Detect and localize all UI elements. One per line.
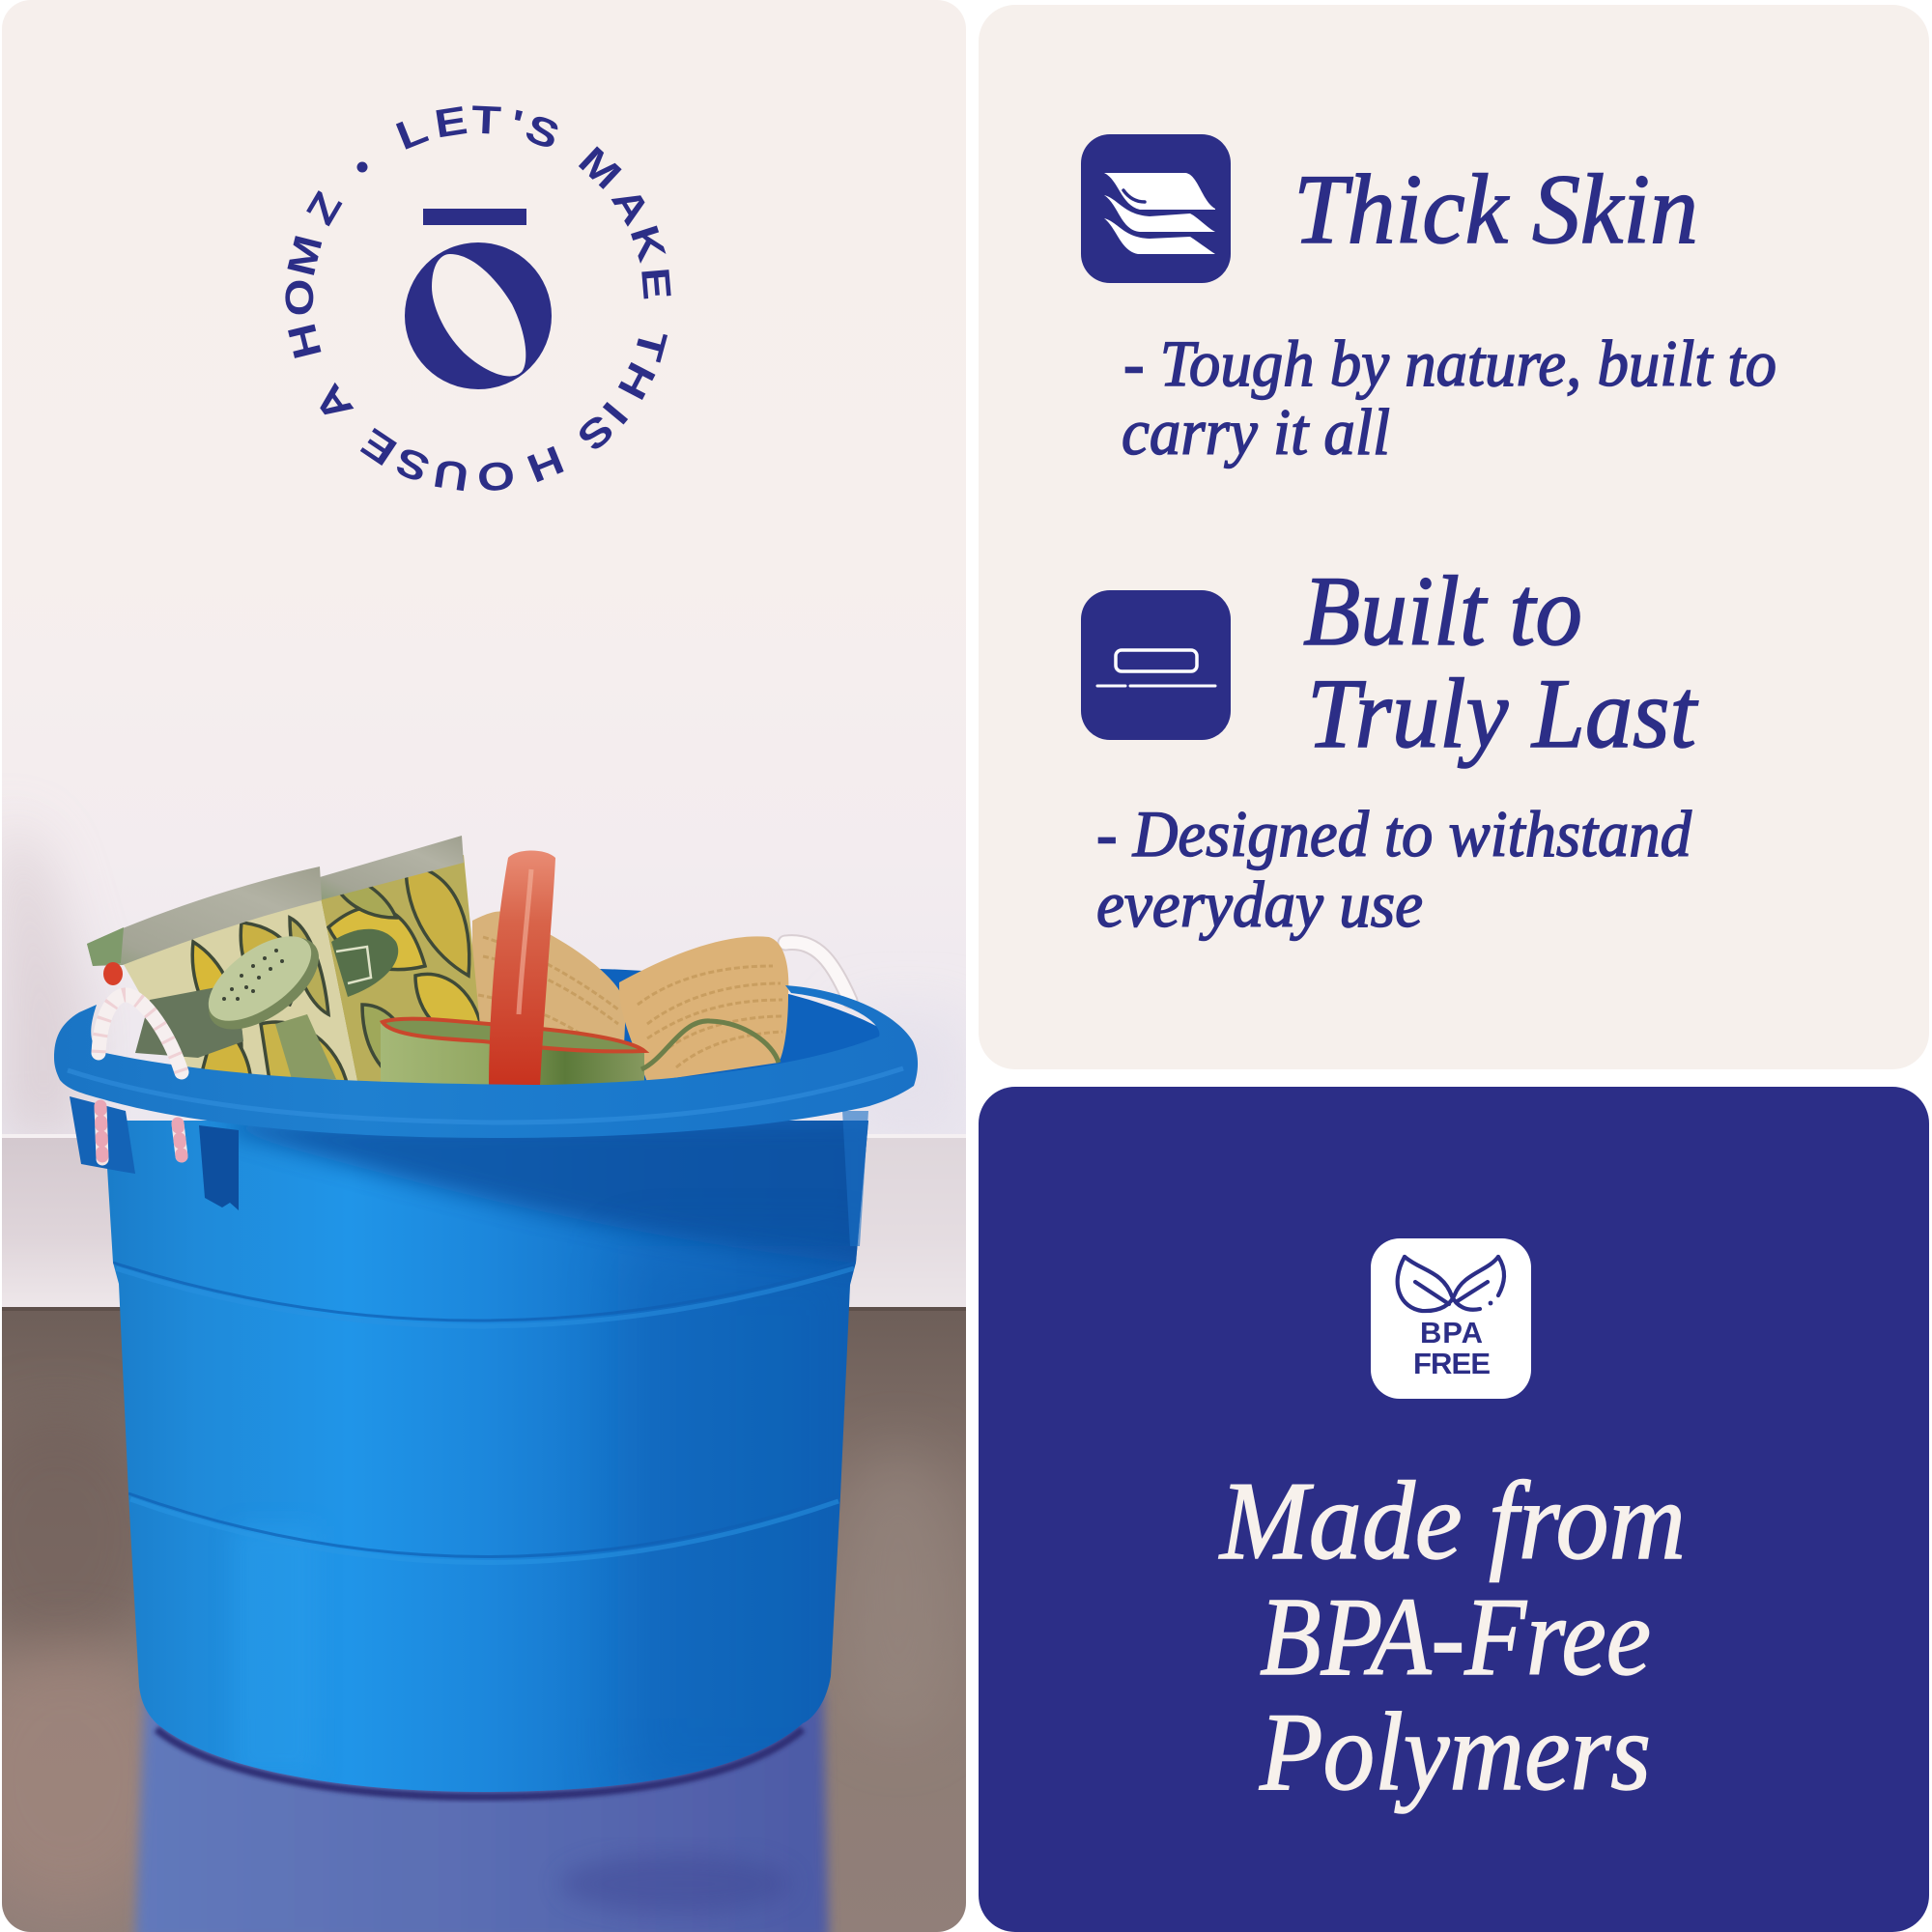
circular slogan: K: [622, 220, 674, 267]
panel: product photo: [0, 0, 966, 1932]
circular slogan: E: [432, 98, 470, 146]
circular slogan: H: [609, 355, 665, 407]
spout: [275, 1014, 336, 1079]
floor: [0, 1307, 966, 1932]
circular slogan: S: [520, 105, 565, 158]
circular slogan: M: [278, 231, 331, 280]
wall background: [0, 0, 966, 1140]
heading: built to truly last: [1303, 556, 1698, 769]
heading: made from bpa-free polymers: Polymers: [1259, 1690, 1651, 1814]
circular slogan: H: [521, 437, 570, 491]
circular slogan: A: [305, 376, 361, 430]
contents of bucket: [87, 836, 898, 1092]
baseboard: [0, 1134, 966, 1308]
text: designed to withstand: [1096, 797, 1692, 941]
icon: layered thick skin: [1081, 134, 1231, 283]
text: tough by nature: - Tough by nature, built to: [1123, 327, 1776, 400]
circular slogan: L: [390, 106, 434, 158]
logo badge: let's make this house a homz: [277, 98, 679, 500]
circular slogan: T: [470, 98, 502, 143]
tub body: [104, 1121, 868, 1792]
text: designed to withstand: everyday use: [1096, 867, 1423, 941]
circular slogan: H: [279, 319, 330, 363]
red lid handle: [489, 850, 555, 1087]
patterned jar front: [87, 867, 358, 1087]
heading: thick skin: Thick Skin: [1293, 155, 1698, 265]
panel: features: [979, 5, 1929, 1069]
circular slogan: A: [603, 180, 659, 233]
rim: [54, 985, 918, 1138]
circular slogan: E: [354, 419, 405, 474]
icon: bpa free leaves: [1371, 1238, 1531, 1399]
circular slogan: [277, 98, 679, 500]
watering can body: [135, 983, 243, 1058]
rope right: [785, 943, 850, 1001]
icon: bpa free leaves: BPA: [1420, 1316, 1483, 1350]
circular slogan: M: [570, 138, 630, 198]
circular slogan: E: [633, 266, 679, 301]
heading: made from bpa-free polymers: BPA-Free: [1260, 1576, 1651, 1699]
bucket back inner wall: [600, 969, 879, 1080]
enamel mug: [381, 1019, 779, 1087]
centre tab: [199, 1125, 239, 1210]
straw hat: [472, 912, 788, 1087]
rope loop: [99, 995, 182, 1072]
left rope handle tab: [70, 1096, 135, 1174]
icon: bpa free leaves: FREE: [1413, 1347, 1491, 1380]
circular slogan: O: [475, 452, 517, 500]
circular slogan: ': [506, 101, 526, 147]
circular slogan: O: [277, 278, 322, 317]
patterned jar back: [320, 836, 486, 1092]
blue tub: [54, 985, 918, 1797]
heading: made from bpa-free polymers: [1218, 1460, 1686, 1814]
text: tough by nature: carry it all: [1122, 395, 1390, 469]
circular slogan: I: [594, 394, 637, 433]
circular slogan: T: [625, 326, 675, 365]
heading: built to truly last: Built to: [1303, 556, 1582, 667]
logo mark: [405, 209, 552, 389]
bucket reflection on floor: [135, 1690, 829, 1932]
heading: built to truly last: Truly Last: [1307, 659, 1698, 769]
circular slogan: S: [569, 406, 622, 460]
right strip: [842, 1111, 868, 1246]
text: designed to withstand: - Designed to withstand: [1096, 797, 1692, 870]
circular slogan: Z: [298, 185, 351, 232]
text: tough by nature: [1122, 327, 1776, 469]
green handle: [331, 929, 398, 997]
heading: made from bpa-free polymers: Made from: [1218, 1460, 1686, 1583]
circular slogan: S: [389, 439, 436, 491]
icon: durable lid: [1081, 590, 1231, 740]
circular slogan: U: [431, 450, 471, 499]
panel: bpa free: [979, 1087, 1929, 1932]
hanging rope ends: [100, 1106, 182, 1159]
watering can rose: [209, 936, 319, 1030]
